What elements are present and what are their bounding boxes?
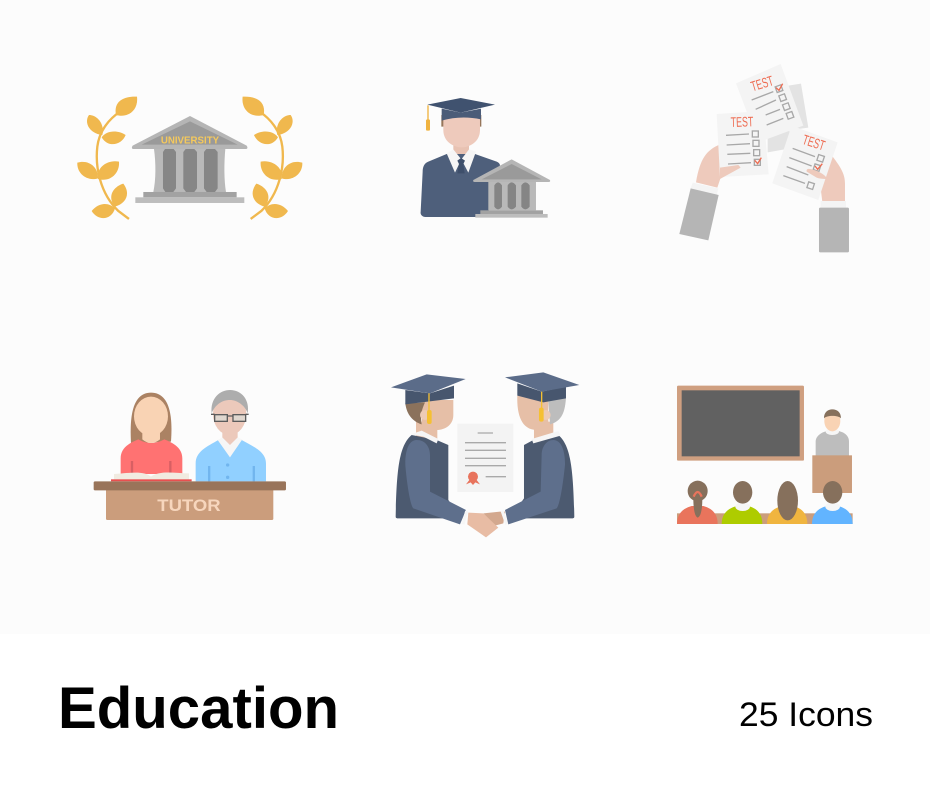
cap board xyxy=(427,98,495,113)
right sleeve xyxy=(819,208,849,252)
icon: classroom lecture xyxy=(677,386,853,524)
blackboard surface xyxy=(682,390,800,456)
back sheet xyxy=(768,84,808,152)
hair xyxy=(441,115,481,127)
left laurel xyxy=(77,97,137,219)
teacher xyxy=(816,409,849,456)
roof xyxy=(132,116,247,149)
icon count: 25 Icons xyxy=(739,696,873,734)
right graduate xyxy=(505,372,579,524)
left cuff xyxy=(691,183,718,195)
tie xyxy=(457,158,465,173)
handshake xyxy=(463,511,507,537)
icon: tutor desk xyxy=(94,390,286,520)
building columns xyxy=(153,149,226,192)
neck xyxy=(453,137,469,158)
student 3 xyxy=(767,481,807,524)
icon: test papers in hands xyxy=(679,64,849,252)
building xyxy=(473,159,550,218)
icon: graduates handshake xyxy=(391,372,579,537)
glasses xyxy=(211,414,249,421)
left hand xyxy=(696,144,741,188)
face xyxy=(443,115,480,147)
label: university: UNIVERSITY xyxy=(161,135,219,146)
left sleeve xyxy=(679,188,719,240)
sheet: left test: TEST xyxy=(730,113,754,130)
collar xyxy=(447,149,476,173)
roof inset xyxy=(142,121,238,145)
left thumb xyxy=(720,165,741,179)
sheet: left test xyxy=(717,111,769,177)
sheet: right test xyxy=(772,126,838,200)
building steps xyxy=(143,192,237,197)
man collar xyxy=(218,437,242,457)
title: Education xyxy=(58,676,339,741)
woman hair xyxy=(131,393,171,443)
sheet: right test: TEST xyxy=(801,131,828,154)
sheet: top test: TEST xyxy=(749,72,775,94)
building base xyxy=(135,197,244,203)
student 1 xyxy=(677,481,718,524)
bench xyxy=(677,513,853,524)
tassel xyxy=(426,105,430,131)
icon: graduate with university xyxy=(421,98,550,218)
shirt details xyxy=(208,463,255,481)
woman shirt xyxy=(121,439,182,474)
man neck xyxy=(222,430,238,450)
book xyxy=(111,472,192,481)
certificate xyxy=(457,424,513,492)
building recesses xyxy=(163,149,218,192)
right cuff xyxy=(821,201,846,208)
woman face xyxy=(134,397,168,436)
cap band xyxy=(442,109,481,121)
blackboard frame xyxy=(677,386,804,461)
icon: university with laurels xyxy=(77,97,302,219)
label: tutor: TUTOR xyxy=(157,497,221,515)
desk front xyxy=(106,489,273,520)
student 2 xyxy=(722,481,762,524)
gown xyxy=(421,154,500,217)
man shirt xyxy=(196,440,266,481)
right laurel xyxy=(242,97,302,219)
student 4 xyxy=(812,481,853,524)
sheet: top test xyxy=(736,64,803,142)
right hand xyxy=(807,157,845,202)
right thumb xyxy=(807,169,827,179)
man face xyxy=(213,393,246,435)
desk top xyxy=(94,481,286,490)
woman arm lines xyxy=(132,461,170,473)
man hair xyxy=(211,390,248,413)
left graduate xyxy=(391,374,466,524)
woman neck xyxy=(142,430,160,443)
podium xyxy=(812,455,852,493)
